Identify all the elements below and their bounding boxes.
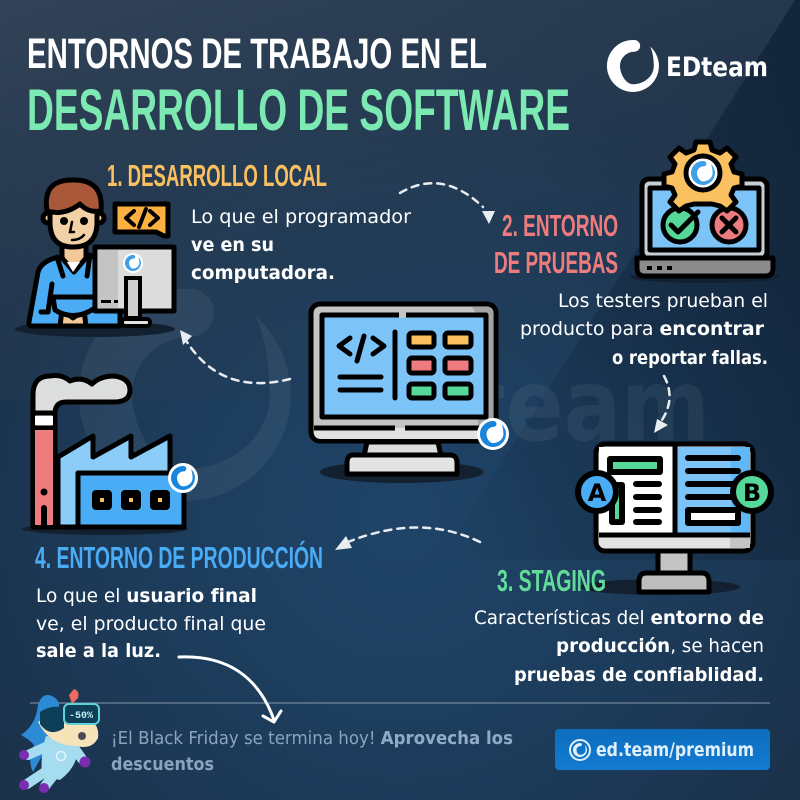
heading: 2. Entorno de pruebas: DE PRUEBAS bbox=[494, 245, 618, 280]
arrow: center to step 1 bbox=[180, 330, 290, 383]
icon: A/B testing monitor: B bbox=[743, 479, 761, 507]
heading: 4. Entorno de produccion: 4. ENTORNO DE PRODUCCIÓN bbox=[35, 539, 323, 575]
text: staging: producción, se hacen bbox=[556, 635, 764, 657]
text: entorno de pruebas: producto para encontrar bbox=[520, 318, 765, 340]
heading: 1. Desarrollo local: 1. DESARROLLO LOCAL bbox=[107, 158, 327, 193]
text: desarrollo local: Lo que el programador bbox=[191, 206, 411, 228]
icon: A/B testing monitor: A bbox=[588, 479, 607, 507]
title bbox=[27, 30, 570, 143]
text: entorno de pruebas: o reportar fallas. bbox=[612, 347, 768, 369]
text: entorno de pruebas bbox=[520, 290, 768, 369]
text: desarrollo local bbox=[191, 206, 411, 284]
text: entorno de produccion bbox=[36, 585, 266, 662]
arrow: step 1 to 2 bbox=[400, 183, 495, 224]
button: ed.team/premium bbox=[555, 729, 770, 770]
icon: central monitor bbox=[311, 304, 509, 483]
footer text: descuentos bbox=[111, 754, 214, 775]
watermark logo bbox=[79, 289, 710, 501]
text: entorno de produccion: sale a la luz. bbox=[36, 640, 161, 662]
footer text: ¡El Black Friday se termina hoy! Aprovecha los bbox=[111, 728, 513, 749]
icon: astronaut unicorn mascot bbox=[19, 689, 99, 793]
icon: laptop with gear bbox=[630, 142, 780, 283]
arrow: step 2 to 3 bbox=[654, 376, 670, 433]
logo: EDteam: EDteam bbox=[666, 52, 768, 83]
arrow: solid white to footer bbox=[179, 657, 281, 722]
watermark logo: team bbox=[465, 347, 710, 464]
text: entorno de pruebas: Los testers prueban el bbox=[558, 290, 768, 312]
text: desarrollo local: computadora. bbox=[191, 262, 335, 284]
text: desarrollo local: ve en su bbox=[191, 234, 274, 256]
text: entorno de produccion: Lo que el usuario final bbox=[36, 585, 257, 607]
heading: 3. Staging: 3. STAGING bbox=[497, 563, 606, 598]
text: staging bbox=[474, 607, 764, 686]
arrow: step 3 to 4 bbox=[335, 528, 480, 550]
icon: A/B testing monitor bbox=[578, 444, 771, 595]
footer text bbox=[111, 728, 513, 775]
icon: factory bbox=[22, 376, 198, 535]
icon: developer at computer bbox=[15, 180, 175, 337]
icon: astronaut unicorn mascot: -50% bbox=[69, 711, 93, 722]
logo: EDteam bbox=[607, 40, 768, 92]
button: ed.team/premium: ed.team/premium bbox=[596, 739, 754, 761]
text: staging: Características del entorno de bbox=[474, 607, 764, 629]
text: entorno de produccion: ve, el producto final que bbox=[36, 613, 266, 635]
heading: 2. Entorno de pruebas: 2. ENTORNO bbox=[502, 208, 618, 243]
heading: 2. Entorno de pruebas bbox=[494, 208, 618, 280]
text: staging: pruebas de confiablidad. bbox=[514, 664, 764, 686]
title: ENTORNOS DE TRABAJO EN EL bbox=[27, 30, 487, 78]
